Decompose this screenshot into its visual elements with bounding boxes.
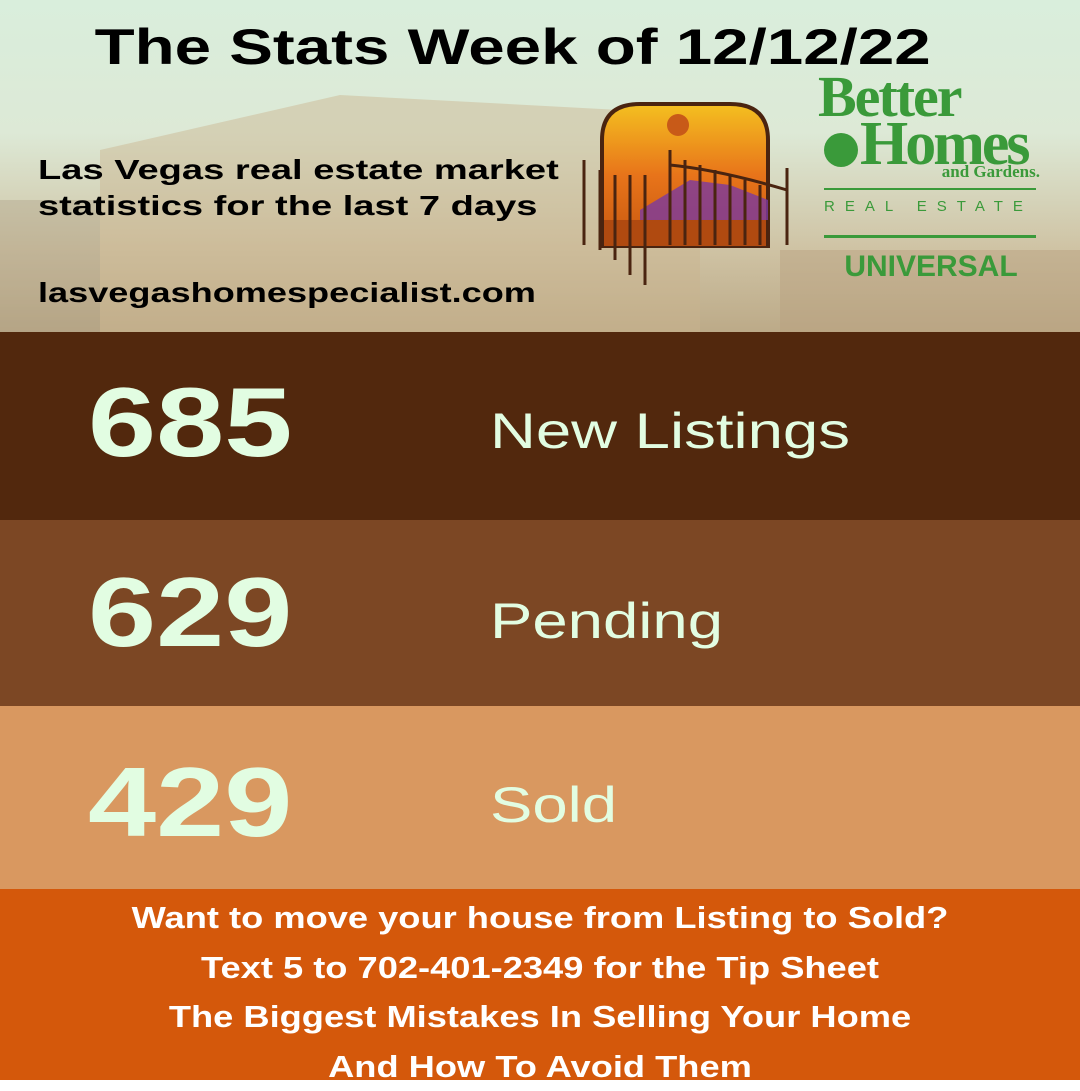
label sold: Sold <box>490 777 617 833</box>
logo: Better Homes and Gardens: and Gardens. <box>942 162 1040 181</box>
label new listings: New Listings <box>490 403 850 459</box>
panel: pending <box>0 520 1080 706</box>
footer callout: Text 5 to 702-401-2349 for the Tip Sheet <box>201 950 879 984</box>
number 629: 629 <box>88 557 292 667</box>
number 429: 429 <box>88 747 292 857</box>
panel: new listings <box>0 332 1080 520</box>
subtitle text <box>38 154 559 221</box>
logo: Better Homes and Gardens: REAL ESTATE <box>824 198 1033 215</box>
header background <box>0 0 1080 332</box>
logo: Better Homes and Gardens: Better <box>818 64 961 129</box>
logo: Better Homes and Gardens <box>818 64 1040 283</box>
subtitle text: Las Vegas real estate market <box>38 154 559 185</box>
title: The Stats Week of 12/12/22 <box>95 19 931 75</box>
footer callout <box>0 889 1080 1080</box>
label pending: Pending <box>490 593 723 649</box>
logo: Better Homes and Gardens: Homes <box>860 110 1028 178</box>
website: lasvegashomespecialist.com <box>38 277 536 308</box>
house photo suggestion <box>0 95 1080 314</box>
footer callout: And How To Avoid Them <box>328 1048 752 1084</box>
logo: Better Homes and Gardens: UNIVERSAL <box>844 250 1018 283</box>
footer callout: The Biggest Mistakes In Selling Your Home <box>169 999 911 1034</box>
number 685: 685 <box>88 367 292 477</box>
footer callout: Want to move your house from Listing to Sold? <box>132 900 948 935</box>
icon: gate logo <box>582 102 788 285</box>
panel: sold <box>0 706 1080 889</box>
subtitle text: statistics for the last 7 days <box>38 190 537 221</box>
